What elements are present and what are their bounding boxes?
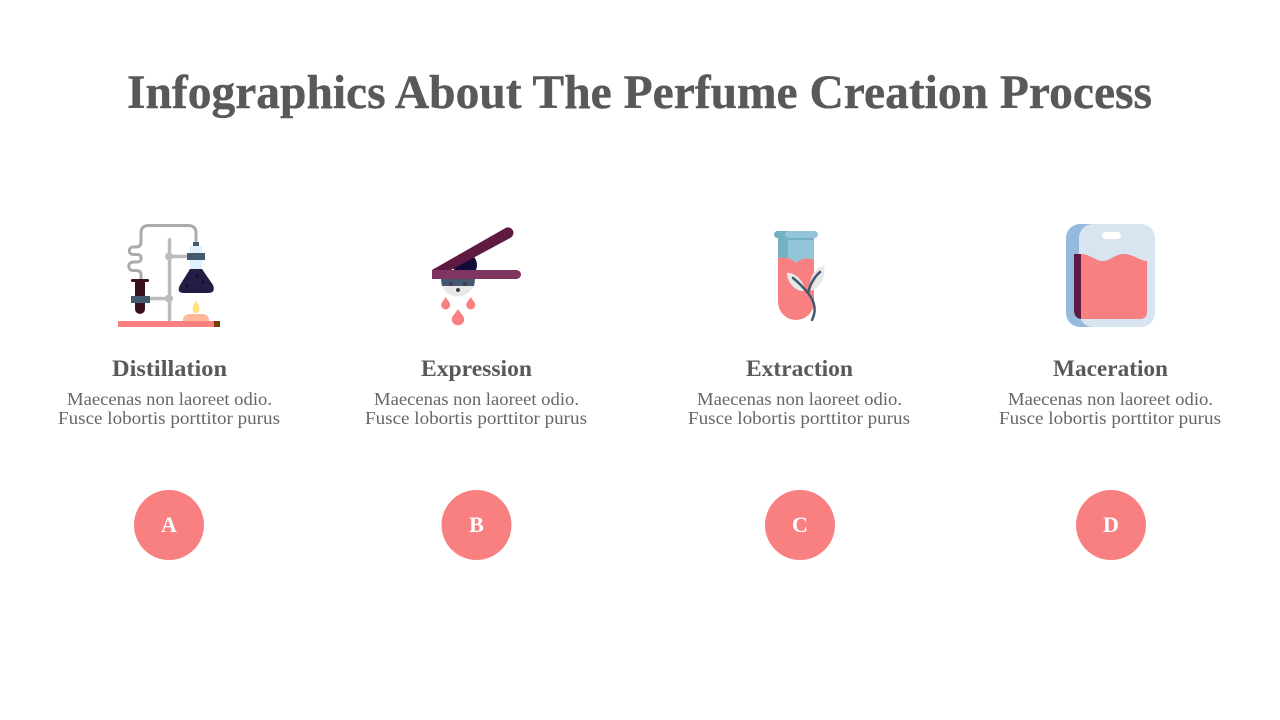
text: extraction description: Maecenas non laoreet odio. xyxy=(697,389,902,409)
heading: extraction: Extraction xyxy=(746,356,853,381)
text: expression description xyxy=(365,389,587,428)
text: expression description: Fusce lobortis porttitor purus xyxy=(365,408,587,428)
panel: extraction xyxy=(688,231,910,560)
icon: distillation apparatus xyxy=(118,226,220,327)
title: Infographics About The Perfume Creation Process xyxy=(127,66,1152,119)
text: maceration description: Fusce lobortis porttitor purus xyxy=(999,408,1221,428)
badge: D xyxy=(1076,490,1146,560)
heading: maceration: Maceration xyxy=(1053,356,1168,381)
badge: A xyxy=(134,490,204,560)
heading: expression: Expression xyxy=(421,356,532,381)
text: distillation description xyxy=(58,389,280,428)
badge: C: C xyxy=(792,512,808,537)
badge: B xyxy=(442,490,512,560)
icon: test tube with plant xyxy=(774,231,824,320)
text: maceration description xyxy=(999,389,1221,428)
icon: fruit press xyxy=(432,227,521,325)
badge: A: A xyxy=(161,512,177,537)
text: maceration description: Maecenas non laoreet odio. xyxy=(1008,389,1213,409)
text: expression description: Maecenas non laoreet odio. xyxy=(374,389,579,409)
panel: maceration xyxy=(999,224,1221,560)
badge: B: B xyxy=(469,512,484,537)
badge: D: D xyxy=(1103,512,1119,537)
panel: distillation xyxy=(58,226,280,560)
panel: expression xyxy=(365,227,587,560)
icon: maceration jar xyxy=(1066,224,1155,327)
heading: distillation: Distillation xyxy=(112,356,227,381)
text: extraction description xyxy=(688,389,910,428)
text: distillation description: Fusce lobortis porttitor purus xyxy=(58,408,280,428)
text: extraction description: Fusce lobortis porttitor purus xyxy=(688,408,910,428)
text: distillation description: Maecenas non laoreet odio. xyxy=(67,389,272,409)
badge: C xyxy=(765,490,835,560)
